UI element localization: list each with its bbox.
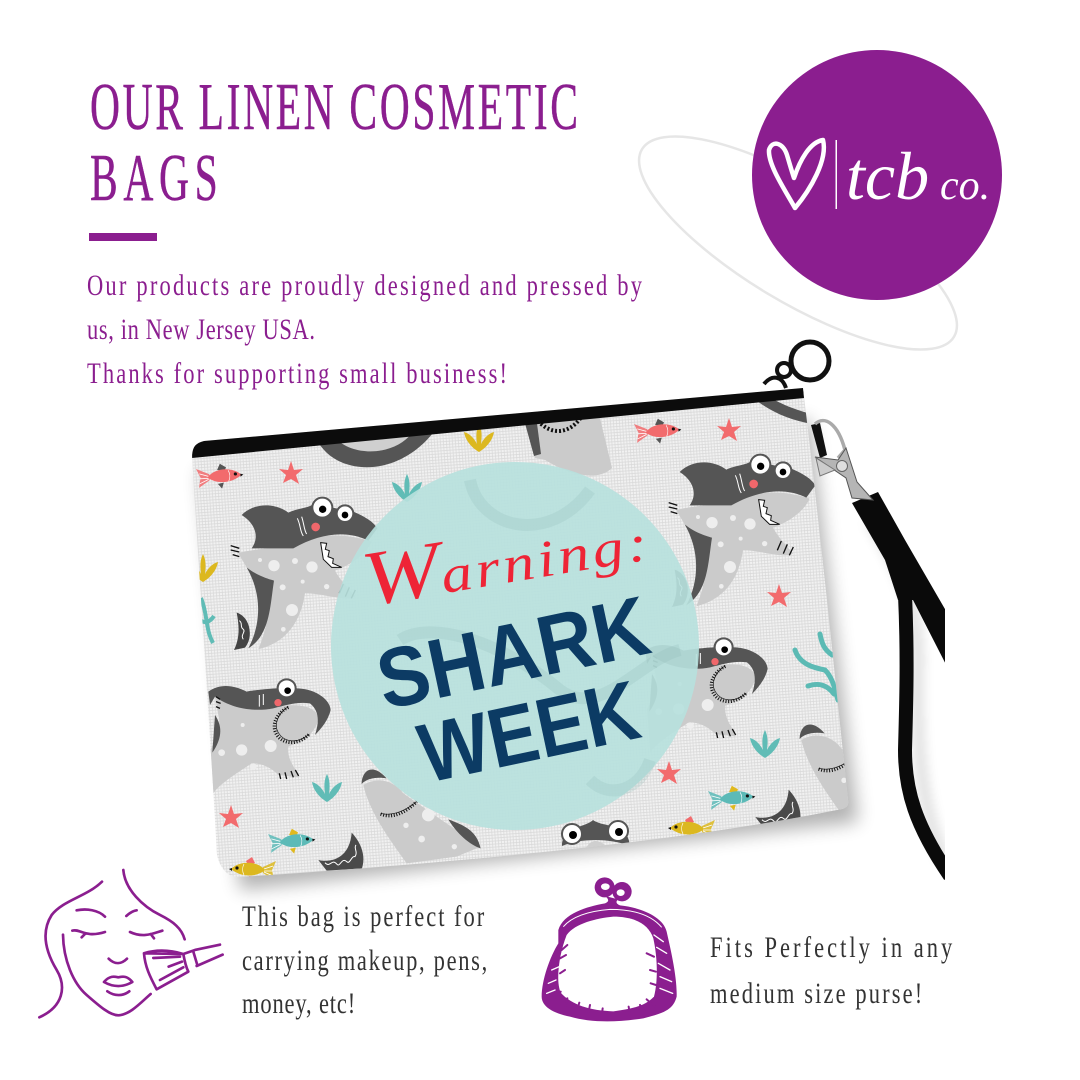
shark print: [188, 392, 919, 882]
intro text: us, in New Jersey USA.: [87, 312, 315, 346]
title: OUR LINEN COSMETIC: [90, 70, 578, 145]
logo heart: [769, 140, 824, 208]
shark week headline: SHARK: [369, 578, 657, 727]
shark week headline: WEEK: [411, 663, 647, 801]
bag shadow: [200, 420, 858, 890]
icon: clasp purse: [542, 877, 677, 1021]
warning script: Warning:: [356, 490, 656, 623]
shark week headline: [369, 578, 657, 801]
logo wordmark: tcb: [846, 138, 929, 214]
zipper band: [192, 386, 804, 458]
logo wordmark: co.: [940, 163, 990, 209]
ghost sharks under label: [400, 480, 680, 790]
teal circle label: [331, 462, 699, 830]
bag body with linen print: [192, 388, 848, 877]
callout: fits in purse: Fits Perfectly in any: [710, 930, 953, 964]
intro text: Our products are proudly designed and pressed by: [87, 268, 643, 302]
callout: fits in purse: [710, 930, 953, 1010]
title: BAGS: [90, 141, 218, 216]
callout: makeup and pens: This bag is perfect for: [242, 899, 484, 933]
callout: makeup and pens: money, etc!: [242, 986, 355, 1020]
metal clasp: [811, 421, 873, 500]
logo divider: [836, 140, 837, 209]
intro text: Thanks for supporting small business!: [87, 356, 507, 390]
wrist strap: [852, 492, 945, 880]
strap shadow: [870, 520, 945, 860]
callout: makeup and pens: [242, 899, 487, 1020]
logo badge: [752, 50, 1002, 300]
callout: makeup and pens: carrying makeup, pens,: [242, 943, 487, 977]
intro text: [87, 268, 643, 390]
icon: face with makeup brush: [39, 870, 223, 1017]
title: [90, 70, 578, 216]
orbit ellipse around logo: [612, 99, 984, 387]
title underline: [89, 233, 157, 241]
callout: fits in purse: medium size purse!: [710, 976, 922, 1010]
cosmetic bag: [192, 388, 848, 877]
zipper pull ring: [764, 342, 829, 388]
